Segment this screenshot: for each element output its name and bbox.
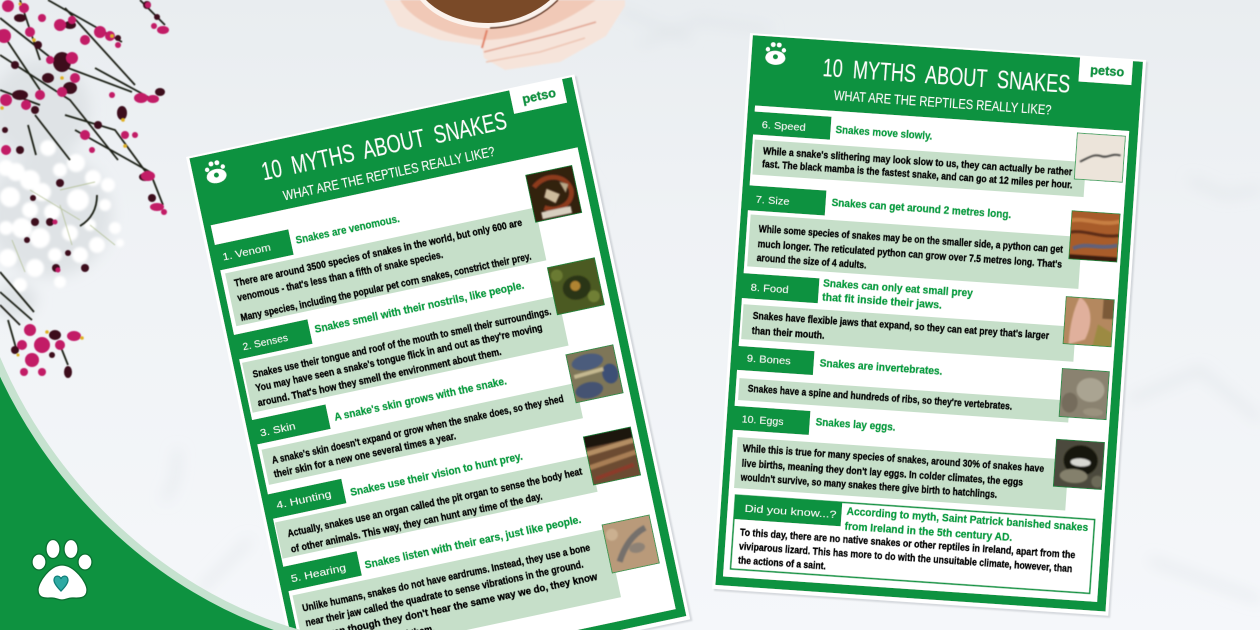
myth 10: eggs: While this is true for many species of snakes, around 30% of snakes have	[742, 443, 1045, 475]
subtitle: WHAT ARE THE REPTILES REALLY LIKE?	[281, 143, 496, 203]
myth 8: food	[732, 272, 1115, 364]
photo: flowers	[0, 0, 169, 378]
myth 9: bones: Snakes have a spine and hundreds of ribs, so they're vertebrates.	[747, 384, 1013, 413]
myth 2: senses: Snakes smell with their nostrils, like people.	[314, 280, 525, 336]
myth 7: size: much longer. The reticulated python can grow over 7.5 metres long. That's	[757, 239, 1063, 271]
myth 4: hunting	[261, 418, 643, 560]
did you know box	[731, 495, 1095, 593]
sheet shadow and paper	[186, 74, 693, 630]
myth 3: skin	[245, 343, 627, 487]
subtitle: WHAT ARE THE REPTILES REALLY LIKE?	[833, 87, 1052, 118]
myth 8: food: than their mouth.	[751, 326, 825, 342]
myth 1: venom: There are around 3500 species of snakes in the world, but only 600 are	[233, 218, 524, 290]
icon: header paw	[765, 42, 787, 65]
did you know box: To this day, there are no native snakes or other reptiles in Ireland, apart from the	[740, 527, 1076, 561]
pink buds	[0, 0, 169, 376]
myth 3: skin: 3. Skin	[259, 420, 297, 440]
myth 7: size: While some species of snakes may be on the smaller side, a python can get	[758, 224, 1064, 256]
left worksheet	[186, 74, 693, 630]
title: 10 MYTHS ABOUT SNAKES	[822, 54, 1071, 99]
photo: snake 9	[1058, 368, 1110, 420]
myth 7: size: Snakes can get around 2 metres long.	[831, 197, 1012, 221]
icon: header paw	[203, 159, 228, 185]
myth 5: hearing	[276, 490, 665, 630]
did you know box: According to myth, Saint Patrick banished snakes	[846, 506, 1089, 534]
corner green wedge	[0, 348, 300, 630]
myth 1: venom: venomous - that's less than a fifth of snake species.	[236, 250, 444, 304]
logo: petso	[521, 85, 557, 107]
myth 10: eggs: live births, meaning they don't lay eggs. In colder climates, the eggs	[741, 458, 1024, 489]
myth 3: skin: A snake's skin grows with the snake.	[333, 375, 508, 424]
myth 1: venom	[207, 165, 590, 329]
dark buds	[2, 1, 165, 378]
yellow buds	[0, 2, 127, 356]
myth 10: eggs: wouldn't survive, so many snakes there give birth to hatchlings.	[740, 472, 998, 501]
green frame and header	[715, 35, 1143, 612]
myth 7: size: around the size of 4 adults.	[756, 253, 867, 271]
myth 1: venom: Many species, including the popular pet corn snakes, constrict their prey.	[240, 251, 533, 324]
myth 6: speed: 6. Speed	[761, 119, 806, 134]
myth 9: bones: Snakes are invertebrates.	[819, 358, 943, 378]
did you know box: Did you know...?	[744, 503, 837, 521]
did you know box: from Ireland in the 5th century AD.	[844, 521, 1013, 544]
myth 5: hearing: Snakes listen with their ears, just like people.	[364, 514, 582, 572]
photo: snake 10	[1052, 438, 1105, 490]
did you know box: viviparous lizard. This has more to do with the unsuitable climate, however, than	[739, 541, 1073, 575]
photo: hand holding coffee cup	[384, 0, 625, 70]
myth 2: senses	[227, 257, 612, 415]
myth 2: senses: Snakes use their tongue and roof of the mouth to smell their surroundings.	[252, 307, 553, 381]
sheet shadow and paper	[712, 33, 1148, 618]
myth 10: eggs: 10. Eggs	[741, 413, 784, 428]
myth 7: size	[737, 185, 1121, 291]
photo: snake 3	[565, 344, 624, 404]
logo: petso	[1090, 62, 1125, 80]
myth 3: skin: their skin for a new one several times a year.	[273, 431, 457, 481]
photo: snake 8	[1062, 296, 1115, 348]
myth 6: speed	[743, 110, 1126, 200]
title: 10 MYTHS ABOUT SNAKES	[259, 107, 509, 186]
icon: corner paw with heart	[32, 540, 92, 600]
myth 9: bones: 9. Bones	[746, 353, 791, 368]
myth 4: hunting: 4. Hunting	[275, 488, 333, 512]
myth 6: speed: Snakes move slowly.	[835, 124, 933, 143]
myth 7: size: 7. Size	[755, 194, 790, 208]
photo: snake 6	[1074, 132, 1126, 183]
photo: snake 7	[1068, 210, 1121, 262]
myth 6: speed: While a snake's slithering may look slow to us, they can actually be rather	[763, 146, 1073, 178]
myth 5: hearing: 5. Hearing	[290, 562, 347, 585]
myth 4: hunting: Snakes use their vision to hunt prey.	[349, 451, 524, 499]
photo: snake 5	[602, 514, 660, 574]
myth 3: skin: A snake's skin doesn't expand or grow when the snake does, so they shed	[271, 394, 565, 467]
myth 5: hearing: Unlike humans, snakes do not have eardrums. Instead, they use a bone	[301, 543, 592, 615]
myth 4: hunting: of other animals. This way, they can hunt any time of the day.	[290, 491, 544, 556]
myth 10: eggs: Snakes lay eggs.	[815, 416, 896, 434]
did you know box: the actions of a saint.	[738, 555, 826, 572]
myth 8: food: 8. Food	[750, 282, 789, 296]
myth 6: speed: fast. The black mamba is the fastest snake, and can go at 12 miles per hour.	[762, 159, 1073, 191]
myth 8: food: Snakes can only eat small prey	[823, 278, 974, 300]
myth 2: senses: You may have seen a snake's tongue flick in and out as they're moving	[255, 323, 544, 394]
myth 10: eggs	[722, 405, 1107, 513]
logo	[509, 77, 567, 114]
soft shadow behind flowers	[0, 60, 112, 318]
photo: snake 2	[546, 257, 605, 316]
white cloud of baby's breath	[0, 140, 124, 292]
myth 4: hunting: Actually, snakes use an organ called the pit organ to sense the body heat	[287, 467, 584, 540]
photo: snake 1	[525, 165, 582, 223]
right worksheet	[712, 33, 1148, 618]
myth 1: venom: 1. Venom	[221, 241, 272, 263]
myth 8: food: that fit inside their jaws.	[822, 292, 942, 312]
myth 9: bones	[728, 345, 1110, 425]
myth 5: hearing: near their jaw called the quadrate to sense vibrations in the ground.	[305, 559, 585, 629]
photo: snake 4	[582, 426, 642, 486]
logo	[1078, 56, 1133, 85]
myth 1: venom: Snakes are venomous.	[295, 213, 401, 247]
myth 2: senses: 2. Senses	[242, 332, 289, 353]
myth 8: food: Snakes have flexible jaws that expand, so they can eat prey that's larger	[752, 311, 1050, 342]
myth 2: senses: around. That's how they smell the environment about them.	[257, 347, 503, 409]
green frame and header	[189, 77, 686, 630]
stems	[0, 0, 165, 365]
